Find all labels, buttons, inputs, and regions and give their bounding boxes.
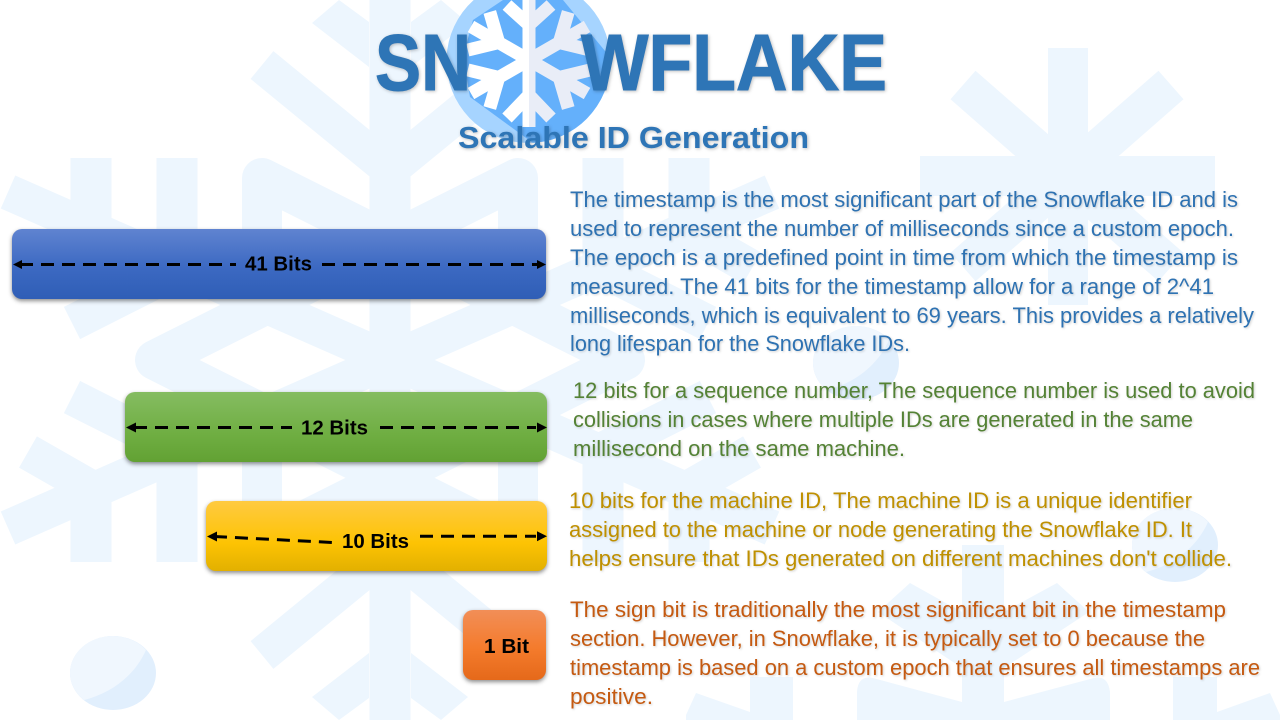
text block: sign bit [570,597,1260,709]
large central snowflake [8,0,772,720]
text block: machine ID: helps ensure that IDs generated on different machines don't collide. [569,546,1232,571]
eight-arm snowflake upper right [920,48,1215,305]
text block: sign bit: The sign bit is traditionally the most significant bit in the timestamp [570,597,1226,622]
text block: timestamp: The timestamp is the most significant part of the Snowflake ID and is [570,187,1238,212]
text block: machine ID [569,488,1232,571]
title [375,18,887,107]
bar: 1 bit [463,610,546,680]
snow ball middle [813,326,899,400]
bar: 1 bit: 1 Bit [484,636,529,658]
text block: timestamp [570,187,1254,356]
bar: 12 bits: 12 Bits [301,418,368,440]
snow ball bottom left [70,636,156,710]
text block: timestamp: used to represent the number of milliseconds since a custom epoch. [570,216,1234,241]
text block: machine ID: assigned to the machine or node generating the Snowflake ID. It [569,517,1192,542]
title: WFLAKE [581,18,887,107]
bar: 41 bits: 41 Bits [245,254,312,276]
text block: sequence number: 12 bits for a sequence number, The sequence number is used to avoid [573,378,1255,403]
lower right snowflake [686,545,1280,720]
bar: 10 bits [206,501,547,571]
bar: 41 bits [12,229,546,299]
text block: sign bit: section. However, in Snowflake, it is typically set to 0 because the [570,626,1205,651]
text block: sequence number: collisions in cases where multiple IDs are generated in the same [573,407,1193,432]
text block: sequence number: millisecond on the same machine. [573,436,905,461]
title: SN [375,18,471,107]
bar: 12 bits [125,392,547,462]
subtitle: Scalable ID Generation [458,120,809,155]
text block: sign bit: positive. [570,684,653,709]
text block: timestamp: long lifespan for the Snowflake IDs. [570,331,910,356]
text block: sequence number [573,378,1255,461]
icon: snowflake logo [446,0,610,143]
text block: timestamp: milliseconds, which is equivalent to 69 years. This provides a relatively [570,303,1254,328]
text block: sign bit: timestamp is based on a custom epoch that ensures all timestamps are [570,655,1260,680]
text block: timestamp: The epoch is a predefined point in time from which the timestamp is [570,245,1238,270]
snow ball right [1132,508,1218,582]
text block: timestamp: measured. The 41 bits for the timestamp allow for a range of 2^41 [570,274,1214,299]
text block: machine ID: 10 bits for the machine ID, The machine ID is a unique identifier [569,488,1192,513]
bar: 10 bits: 10 Bits [342,531,409,553]
